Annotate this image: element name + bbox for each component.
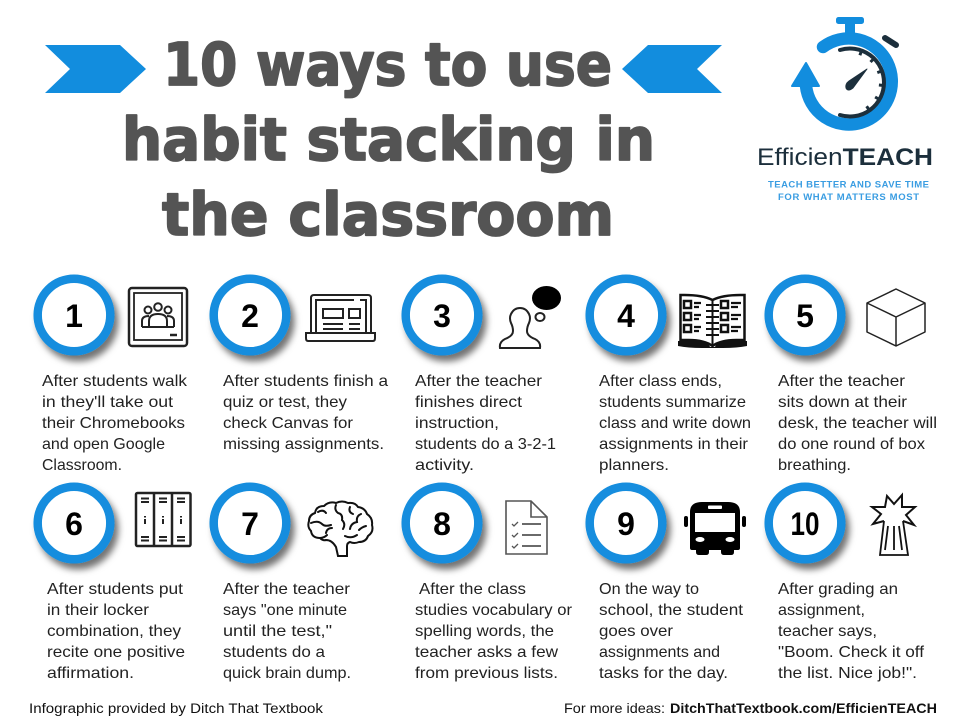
title: the classroom — [162, 180, 614, 249]
step 6 text: in their locker — [47, 602, 150, 619]
step 3 text: instruction, — [415, 415, 499, 432]
number badge 6: 6 — [65, 506, 83, 542]
step 8 text: from previous lists. — [415, 665, 558, 682]
logo tagline: FOR WHAT MATTERS MOST — [778, 192, 919, 203]
step 9 text: goes over — [599, 623, 674, 640]
arrow: right title ribbon — [622, 45, 722, 93]
number badge 9: 9 — [617, 506, 635, 542]
step 5 — [769, 279, 937, 474]
number badge 4: 4 — [617, 298, 635, 334]
step 3 — [406, 279, 561, 474]
icon: brain — [308, 502, 372, 556]
icon: lockers — [136, 493, 190, 546]
step 3 text — [415, 373, 556, 474]
step 9 — [590, 487, 746, 682]
step 7 text: quick brain dump. — [223, 665, 351, 682]
step 5 text — [778, 373, 937, 474]
step 1 text: their Chromebooks — [42, 415, 185, 432]
logo: EfficienTEACH — [757, 17, 933, 203]
step 1 text — [42, 373, 188, 474]
number badge 2: 2 — [241, 298, 259, 334]
number badge 4 — [590, 279, 662, 351]
number badge 5: 5 — [796, 298, 814, 334]
step 6 text: After students put — [47, 581, 184, 598]
step 6 text: affirmation. — [47, 665, 134, 682]
step 5 text: breathing. — [778, 457, 851, 474]
number badge 10: 10 — [790, 506, 820, 542]
step 2 text — [223, 373, 388, 453]
number badge 1: 1 — [65, 298, 83, 334]
number badge 3 — [406, 279, 478, 351]
icon: thinking person — [500, 286, 561, 348]
number badge 5 — [769, 279, 841, 351]
step 1 text: and open Google — [42, 436, 165, 453]
step 6 text — [47, 581, 185, 682]
step 3 text: finishes direct — [415, 394, 523, 411]
logo wordmark: Efficien TEACH — [757, 144, 933, 171]
step 4 text — [599, 373, 751, 474]
step 8 — [406, 487, 573, 682]
step 5 text: desk, the teacher will — [778, 415, 937, 432]
number badge 10 — [769, 487, 841, 559]
footer: more ideas link: DitchThatTextbook.com/EfficienTEACH — [670, 701, 937, 716]
step 3 text: After the teacher — [415, 373, 543, 390]
step 1 text: Classroom. — [42, 457, 122, 474]
number badge 8: 8 — [433, 506, 451, 542]
step 10 — [769, 487, 925, 682]
step 2 text: missing assignments. — [223, 436, 384, 453]
icon: bus — [684, 502, 746, 555]
step 7 text: says "one minute — [223, 602, 347, 619]
title — [122, 30, 655, 249]
arrow: left title ribbon — [45, 45, 146, 93]
step 8 text: studies vocabulary or — [415, 602, 573, 619]
number badge 3: 3 — [433, 298, 451, 334]
icon: open planner — [678, 295, 747, 348]
step 4 text: class and write down — [599, 415, 751, 432]
step 4 text: After class ends, — [599, 373, 722, 390]
step 10 text: assignment, — [778, 602, 865, 619]
step 9 text: school, the student — [599, 602, 744, 619]
logo tagline — [768, 180, 929, 203]
logo tagline: TEACH BETTER AND SAVE TIME — [768, 180, 929, 190]
step 1 text: After students walk — [42, 373, 188, 390]
step 4 text: students summarize — [599, 394, 746, 411]
footer: more ideas link: For more ideas: — [564, 701, 665, 716]
number badge 8 — [406, 487, 478, 559]
step 9 text: tasks for the day. — [599, 665, 728, 682]
title: 10 ways to use — [163, 30, 612, 99]
number badge 6 — [38, 487, 110, 559]
step 5 text: sits down at their — [778, 394, 908, 411]
step 10 text: After grading an — [778, 581, 898, 598]
icon: classroom — [129, 288, 187, 346]
step 2 text: check Canvas for — [223, 415, 354, 432]
step 7 text: students do a — [223, 644, 325, 661]
step 9 text — [599, 581, 744, 682]
step 8 text: After the class — [419, 581, 526, 598]
step 1 — [38, 279, 188, 474]
step 1 text: in they'll take out — [42, 394, 174, 411]
icon: checklist document — [506, 501, 547, 554]
step 9 text: On the way to — [599, 581, 699, 598]
step 10 text: the list. Nice job!". — [778, 665, 917, 682]
step 7 — [214, 487, 372, 682]
step 3 text: activity. — [415, 457, 474, 474]
icon: stopwatch — [792, 17, 896, 124]
step 7 text: until the test," — [223, 623, 332, 640]
step 4 text: assignments in their — [599, 436, 749, 453]
step 7 text — [223, 581, 351, 682]
number badge 7: 7 — [241, 506, 259, 542]
step 7 text: After the teacher — [223, 581, 351, 598]
step 8 text: spelling words, the — [415, 623, 554, 640]
icon: box — [867, 289, 925, 346]
step 2 — [214, 279, 388, 453]
step 5 text: After the teacher — [778, 373, 906, 390]
step 6 text: combination, they — [47, 623, 181, 640]
footer: more ideas link — [564, 701, 937, 716]
icon: laptop — [306, 295, 375, 341]
step 6 — [38, 487, 191, 682]
number badge 1 — [38, 279, 110, 351]
step 8 text — [415, 581, 573, 682]
title: habit stacking in — [122, 105, 655, 174]
step 10 text: "Boom. Check it off — [778, 644, 925, 661]
step 2 text: quiz or test, they — [223, 394, 347, 411]
step 8 text: teacher asks a few — [415, 644, 558, 661]
number badge 9 — [590, 487, 662, 559]
step 4 — [590, 279, 751, 474]
step 2 text: After students finish a — [223, 373, 388, 390]
step 10 text: teacher says, — [778, 623, 877, 640]
number badge 7 — [214, 487, 286, 559]
step 9 text: assignments and — [599, 644, 720, 661]
step 3 text: students do a 3-2-1 — [415, 436, 556, 453]
step 4 text: planners. — [599, 457, 669, 474]
icon: shooting star — [872, 495, 915, 555]
footer: credit: Infographic provided by Ditch That Textbook — [29, 701, 323, 716]
step 5 text: do one round of box — [778, 436, 925, 453]
step 10 text — [778, 581, 925, 682]
number badge 2 — [214, 279, 286, 351]
step 6 text: recite one positive — [47, 644, 185, 661]
